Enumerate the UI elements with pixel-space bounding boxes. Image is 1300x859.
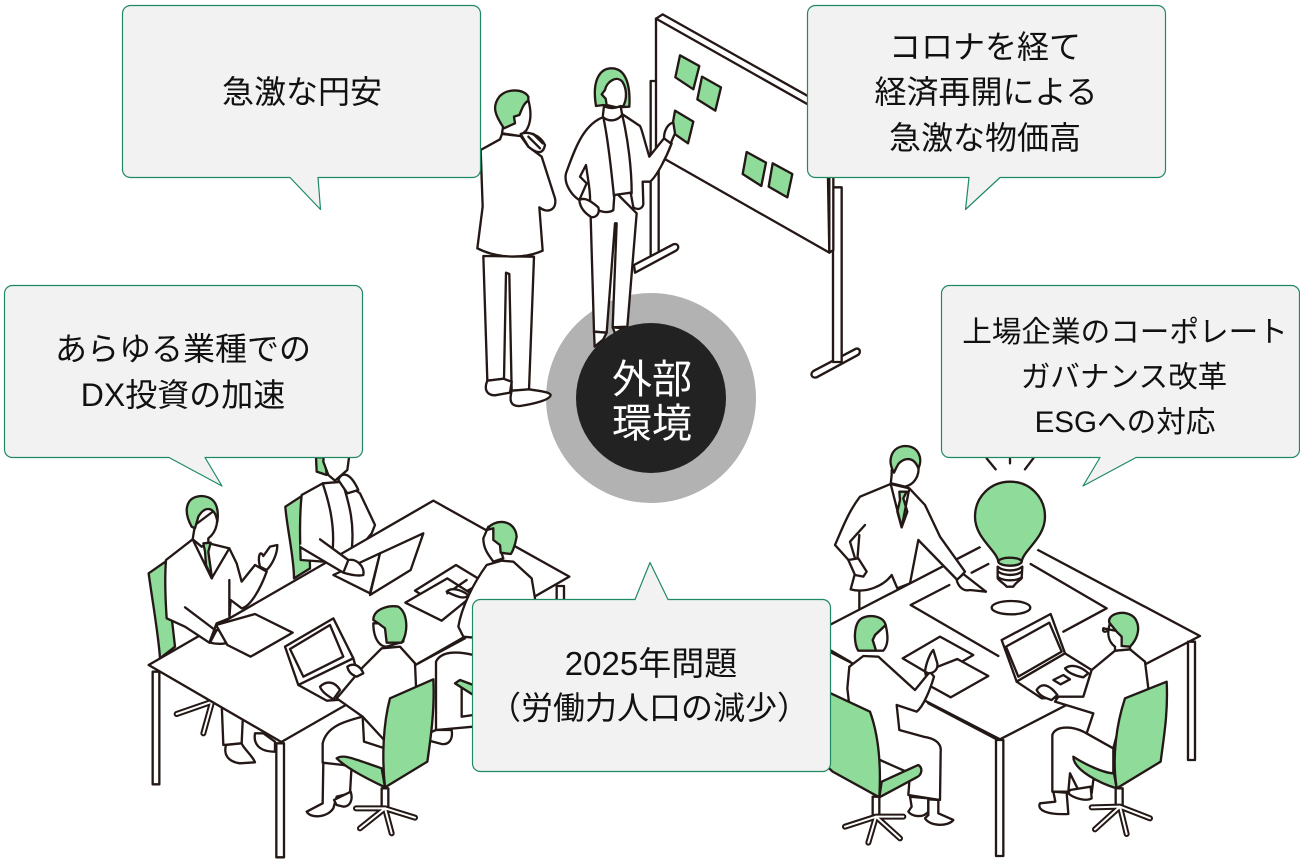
paper on table [216, 614, 293, 657]
callout: governance and ESG [942, 286, 1300, 486]
back woman's forearm over table [299, 539, 364, 576]
callout: inflation: 経済再開による [874, 74, 1098, 110]
table top [149, 501, 569, 742]
illustration: meeting table on the left [149, 450, 569, 857]
rear chair bases and legs under table [177, 701, 275, 763]
table legs [996, 642, 1195, 856]
green chair left [820, 688, 921, 843]
callout: 2025 problem: 2025年問題 [565, 645, 737, 682]
callout: DX investment [4, 286, 362, 486]
callout: DX investment: DX投資の加速 [81, 377, 285, 413]
callout: DX investment: あらゆる業種での [55, 331, 311, 367]
callout: inflation: コロナを経て [889, 29, 1081, 65]
illustration: lightbulb meeting on the right [820, 446, 1200, 856]
centre badge [576, 323, 726, 473]
whiteboard stand [634, 81, 860, 378]
green chair backs behind table [149, 492, 310, 658]
green chair in front [337, 679, 434, 833]
green chair right [1073, 682, 1167, 834]
man with glasses [1037, 613, 1148, 814]
table top [820, 533, 1200, 739]
whiteboard [656, 14, 833, 253]
callout: 2025 problem [472, 562, 830, 772]
callout: governance and ESG: 上場企業のコーポレート [962, 316, 1288, 349]
papers under pointing hand [903, 637, 988, 697]
centre badge: 環境 [612, 402, 692, 446]
laptop at back [333, 533, 423, 595]
callout: inflation: 急激な物価高 [889, 120, 1081, 156]
outer grey ring of centre badge [546, 293, 756, 503]
seated man's legs [418, 638, 473, 744]
callout: weak yen: 急激な円安 [222, 74, 382, 110]
woman pointing at board [566, 68, 675, 347]
callout: inflation [808, 6, 1166, 210]
lightbulb [975, 458, 1045, 587]
table legs [153, 586, 564, 857]
laptop [1002, 614, 1092, 698]
woman at the back, torso [300, 450, 375, 563]
callout: governance and ESG: ガバナンス改革 [1021, 361, 1227, 394]
seated man at right from behind [447, 522, 535, 643]
seated woman left [830, 616, 997, 825]
centre badge: 外部 [612, 358, 692, 402]
papers at right of table [405, 565, 483, 621]
seated man on left, gesturing [165, 496, 277, 644]
man seen from behind [477, 90, 555, 406]
callout: weak yen [122, 6, 480, 210]
sticky notes [671, 55, 792, 197]
callout: 2025 problem: （労働力人口の減少） [489, 690, 809, 726]
pad on table [911, 564, 1107, 656]
standing man pointing [835, 446, 986, 592]
illustration: two people at a whiteboard [477, 14, 860, 406]
right chair partly hidden [455, 680, 473, 695]
callout: governance and ESG: ESGへの対応 [1035, 406, 1215, 439]
seated woman in front [307, 606, 417, 816]
standing man lower legs [856, 590, 863, 610]
laptop in front [285, 618, 360, 701]
